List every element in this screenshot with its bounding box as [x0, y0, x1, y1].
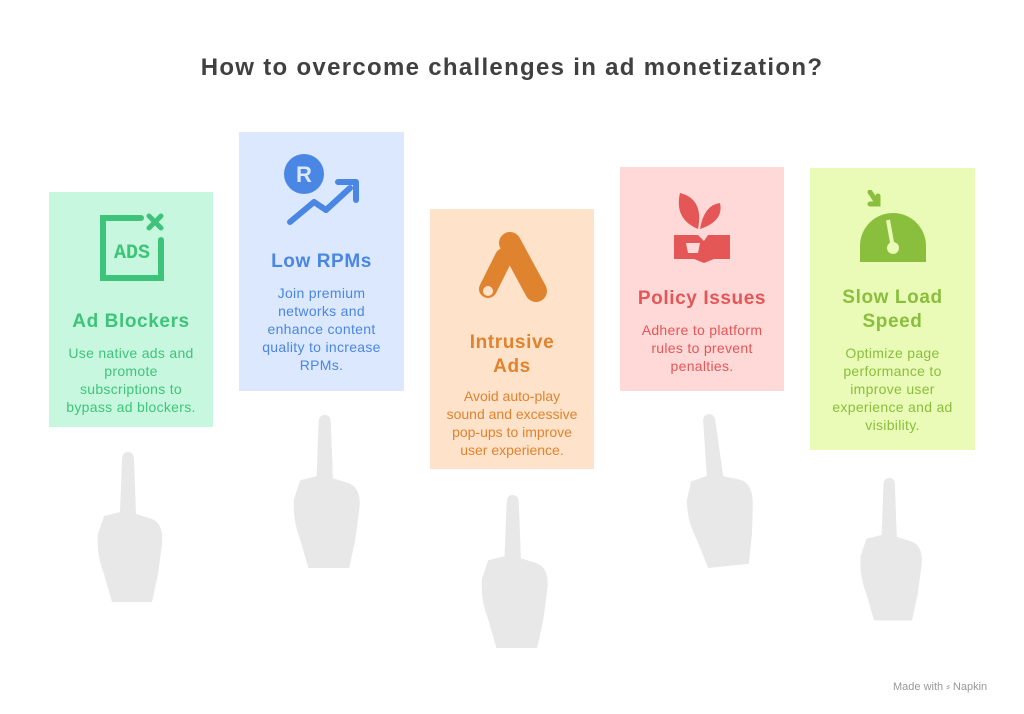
panel: low rpms: Join premium networks and enhance content quality to increase RPMs. [262, 285, 381, 373]
icon: ads [100, 214, 164, 281]
panel: intrusive ads: pop-ups to improve [452, 424, 572, 440]
panel: ad blockers [49, 192, 213, 427]
panel: low rpms: Low RPMs [271, 251, 372, 272]
icon: revenue up: R [296, 162, 312, 187]
panel: policy issues [620, 167, 784, 391]
panel: intrusive ads: sound and excessive [447, 406, 577, 422]
panel: intrusive ads: Avoid auto-play [464, 388, 560, 404]
panel: low rpms [239, 132, 404, 391]
panel: intrusive ads: user experience. [460, 442, 564, 458]
icon: google ads [479, 232, 547, 302]
panel: slow load speed: Slow Load [842, 287, 943, 308]
panel: slow load speed: Speed [862, 311, 923, 332]
hand 5 [860, 478, 922, 620]
title: How to overcome challenges in ad monetization? [201, 54, 823, 81]
panel: policy issues: Policy Issues [638, 288, 766, 309]
hand 4 [678, 411, 759, 570]
hand 1 [98, 452, 162, 602]
panel: ad blockers: Ad Blockers [72, 311, 190, 332]
icon: ads: ADS [114, 242, 150, 265]
panel: ad blockers: Use native ads and promote subscriptions to bypass ad blockers. [66, 345, 196, 415]
hand 3 [482, 495, 548, 648]
icon: revenue up [284, 154, 359, 225]
icon: speedometer [860, 190, 926, 262]
icon: plant hands [674, 193, 730, 263]
panel: intrusive ads [430, 209, 594, 469]
panel: intrusive ads: Ads [493, 356, 531, 377]
panel: slow load speed: Optimize page performance to improve user experience and ad visibility. [832, 345, 953, 433]
footer: Made with ⸗ Napkin [893, 681, 987, 693]
panel: slow load speed [810, 168, 975, 450]
panel: intrusive ads: Intrusive [470, 332, 554, 353]
hand 2 [294, 415, 360, 568]
panel: policy issues: Adhere to platform rules to prevent penalties. [642, 322, 762, 374]
